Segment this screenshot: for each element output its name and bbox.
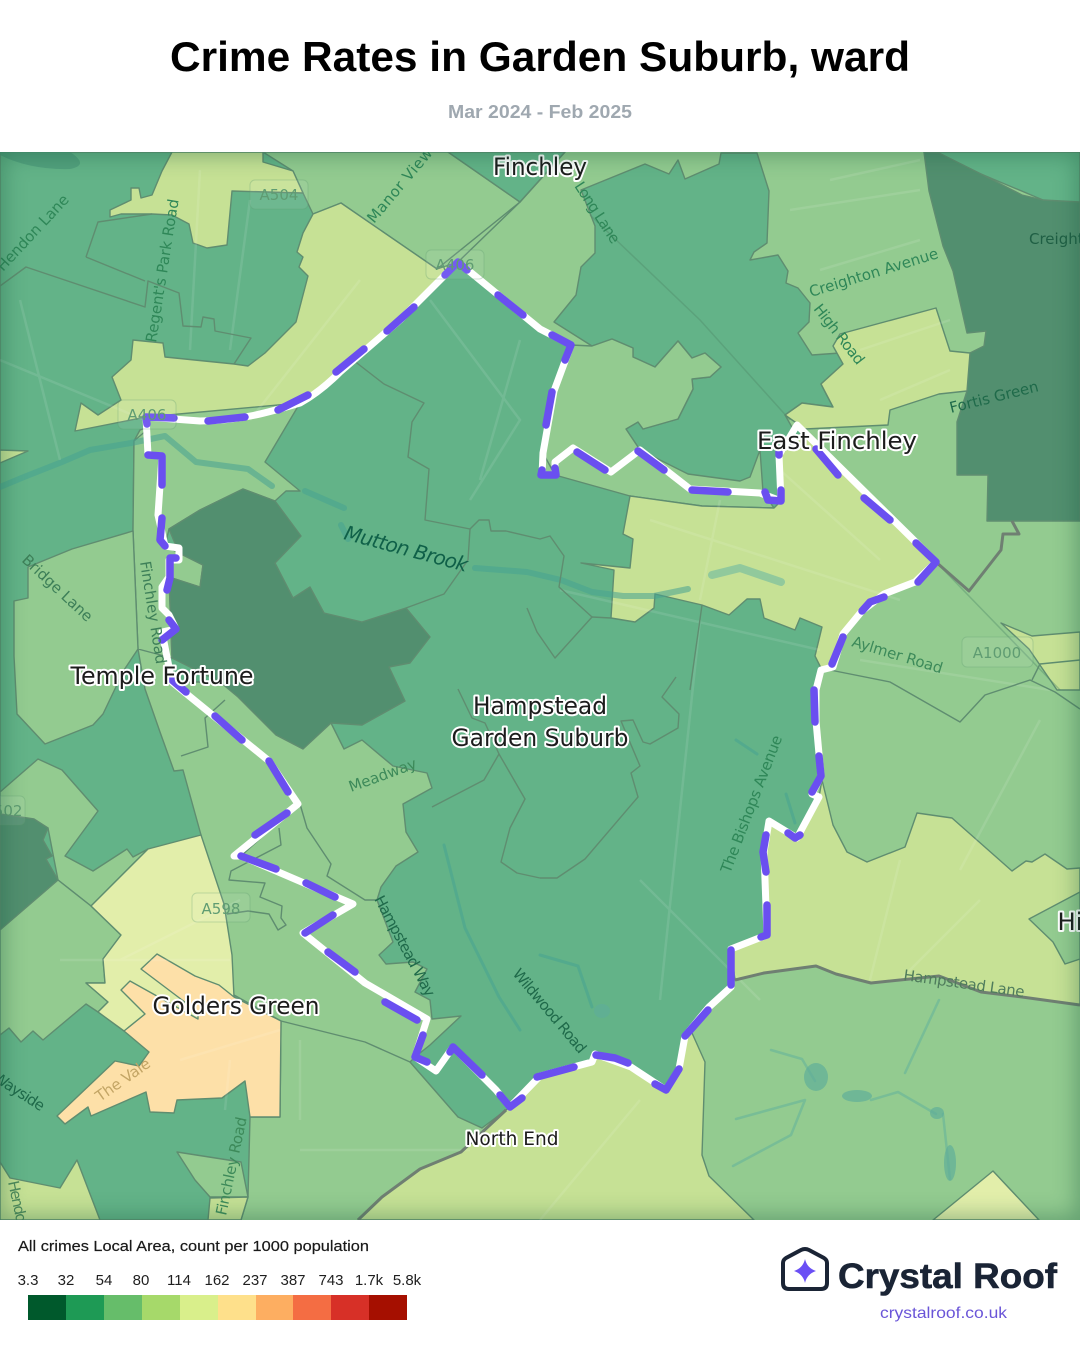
- place name labels: Temple Fortune: [70, 662, 254, 690]
- road and water labels: Finchley Road: [212, 1115, 251, 1217]
- road and water labels: Long Lane: [571, 178, 624, 247]
- legend scale values: 1.7k: [355, 1272, 384, 1289]
- road number badges: [0, 180, 1033, 922]
- road number badges: A1000: [973, 644, 1021, 662]
- legend scale values: 743: [318, 1272, 344, 1289]
- legend scale values: 114: [167, 1272, 191, 1289]
- road and water labels: Hampstead Way: [370, 892, 439, 1000]
- rivers and ponds: [0, 436, 950, 1179]
- place name labels: Finchley: [493, 153, 587, 181]
- legend scale values: 387: [280, 1272, 306, 1289]
- faint main road lines: [590, 215, 1060, 690]
- road and water labels: Wildwood Road: [509, 965, 590, 1057]
- place name labels: East Finchley: [757, 427, 917, 455]
- legend scale values: 237: [242, 1272, 268, 1289]
- road number badges: A598: [202, 900, 240, 918]
- place name labels: Golders Green: [152, 992, 320, 1020]
- legend scale values: 162: [204, 1272, 230, 1289]
- road number badges: A406: [128, 406, 166, 424]
- road and water labels: Finchley Road: [136, 560, 170, 665]
- road number badges: A406: [436, 256, 474, 274]
- neighbourhood polygons: [0, 152, 1080, 1220]
- road and water labels: Fortis Green: [948, 377, 1040, 417]
- road and water labels: Creighton Avenue: [807, 244, 940, 301]
- legend colour bar: [28, 1295, 407, 1320]
- internal boundary lines: [0, 152, 1080, 1062]
- road and water labels: High Road: [810, 300, 868, 368]
- date range subtitle: Mar 2024 - Feb 2025: [448, 102, 632, 122]
- map edge vignette: [0, 152, 1080, 1220]
- ponds: [0, 152, 956, 1181]
- faint street network: [0, 160, 1050, 1220]
- legend scale values: [18, 1272, 422, 1289]
- road and water labels: The Vale: [91, 1054, 154, 1106]
- heavy administrative boundary lines: [358, 521, 1080, 1220]
- place name labels: Hampstead: [473, 692, 607, 720]
- road number badges: A504: [260, 186, 298, 204]
- road and water labels: Aylmer Road: [850, 633, 945, 677]
- ward boundary dashed outline: [146, 262, 936, 1107]
- place name labels: [70, 153, 1080, 1150]
- road and water labels: Mutton Brook: [342, 521, 472, 577]
- logo wordmark: Crystal Roof: [838, 1257, 1057, 1296]
- icon: house with star: [783, 1249, 827, 1289]
- legend scale values: 32: [58, 1272, 74, 1289]
- place name labels: North End: [466, 1128, 558, 1150]
- legend scale values: 5.8k: [393, 1272, 422, 1289]
- place name labels: Garden Suburb: [452, 724, 628, 752]
- legend scale values: 54: [96, 1272, 112, 1289]
- logo: Crystal Roof: [783, 1249, 1057, 1322]
- legend scale values: 80: [133, 1272, 149, 1289]
- choropleth map: [0, 152, 1080, 1220]
- website url: crystalroof.co.uk: [880, 1305, 1008, 1322]
- legend: [18, 1238, 422, 1320]
- legend scale values: 3.3: [18, 1272, 38, 1289]
- road and water labels: Regent's Park Road: [142, 198, 183, 344]
- title: Crime Rates in Garden Suburb, ward: [170, 33, 910, 80]
- base map area: [0, 152, 1080, 1220]
- road and water labels: The Bishops Avenue: [717, 733, 786, 876]
- road and water labels: Hampstead Lane: [902, 966, 1026, 1001]
- road and water labels: Bridge Lane: [18, 551, 96, 625]
- road and water labels: Meadway: [346, 755, 419, 796]
- legend heading: All crimes Local Area, count per 1000 population: [18, 1238, 369, 1255]
